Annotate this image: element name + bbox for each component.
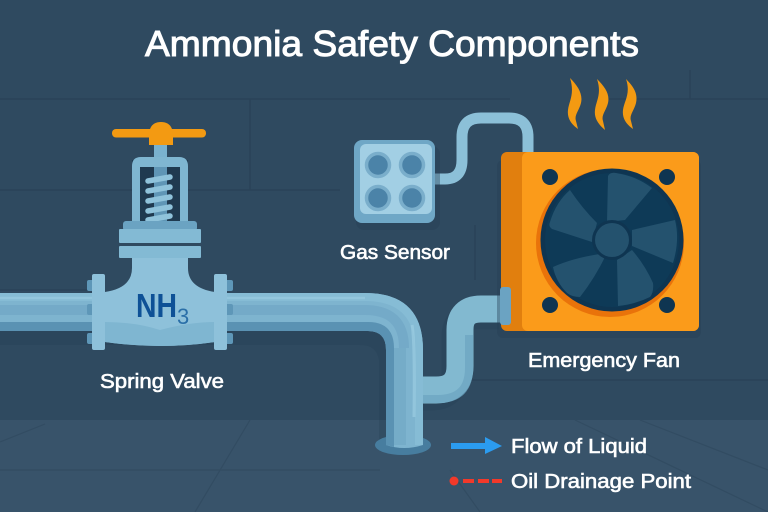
fan bolts (542, 169, 675, 313)
valve flanges (92, 274, 105, 350)
emergency fan label: Emergency Fan (528, 350, 680, 372)
legend text: oil: Oil Drainage Point (511, 471, 691, 493)
emergency fan (497, 152, 701, 338)
gas sensor (354, 140, 440, 230)
fan pipe flange (500, 287, 511, 325)
valve stem (154, 143, 167, 163)
yoke (132, 157, 188, 223)
valve body (105, 258, 215, 346)
drain pipe to fan (418, 309, 504, 399)
sensor cable (435, 118, 528, 179)
spring (148, 177, 170, 220)
title: Ammonia Safety Components (145, 23, 639, 64)
valve handle (112, 122, 206, 145)
flange bolts (87, 280, 233, 344)
floor (0, 420, 768, 512)
main pipe (0, 293, 431, 455)
heat waves (568, 78, 637, 130)
gas sensor label: Gas Sensor (340, 242, 450, 264)
pipe base (375, 435, 431, 455)
legend text: flow: Flow of Liquid (511, 436, 647, 458)
NH3: NH (136, 287, 177, 324)
bonnet flanges (123, 221, 197, 231)
oil drainage marker (450, 476, 502, 486)
legend (450, 436, 691, 493)
arrow: flow of liquid (451, 437, 502, 454)
fan blades (549, 173, 677, 306)
spring valve (87, 122, 233, 350)
spring valve label: Spring Valve (100, 371, 224, 393)
spring valve: 3 (177, 304, 189, 329)
